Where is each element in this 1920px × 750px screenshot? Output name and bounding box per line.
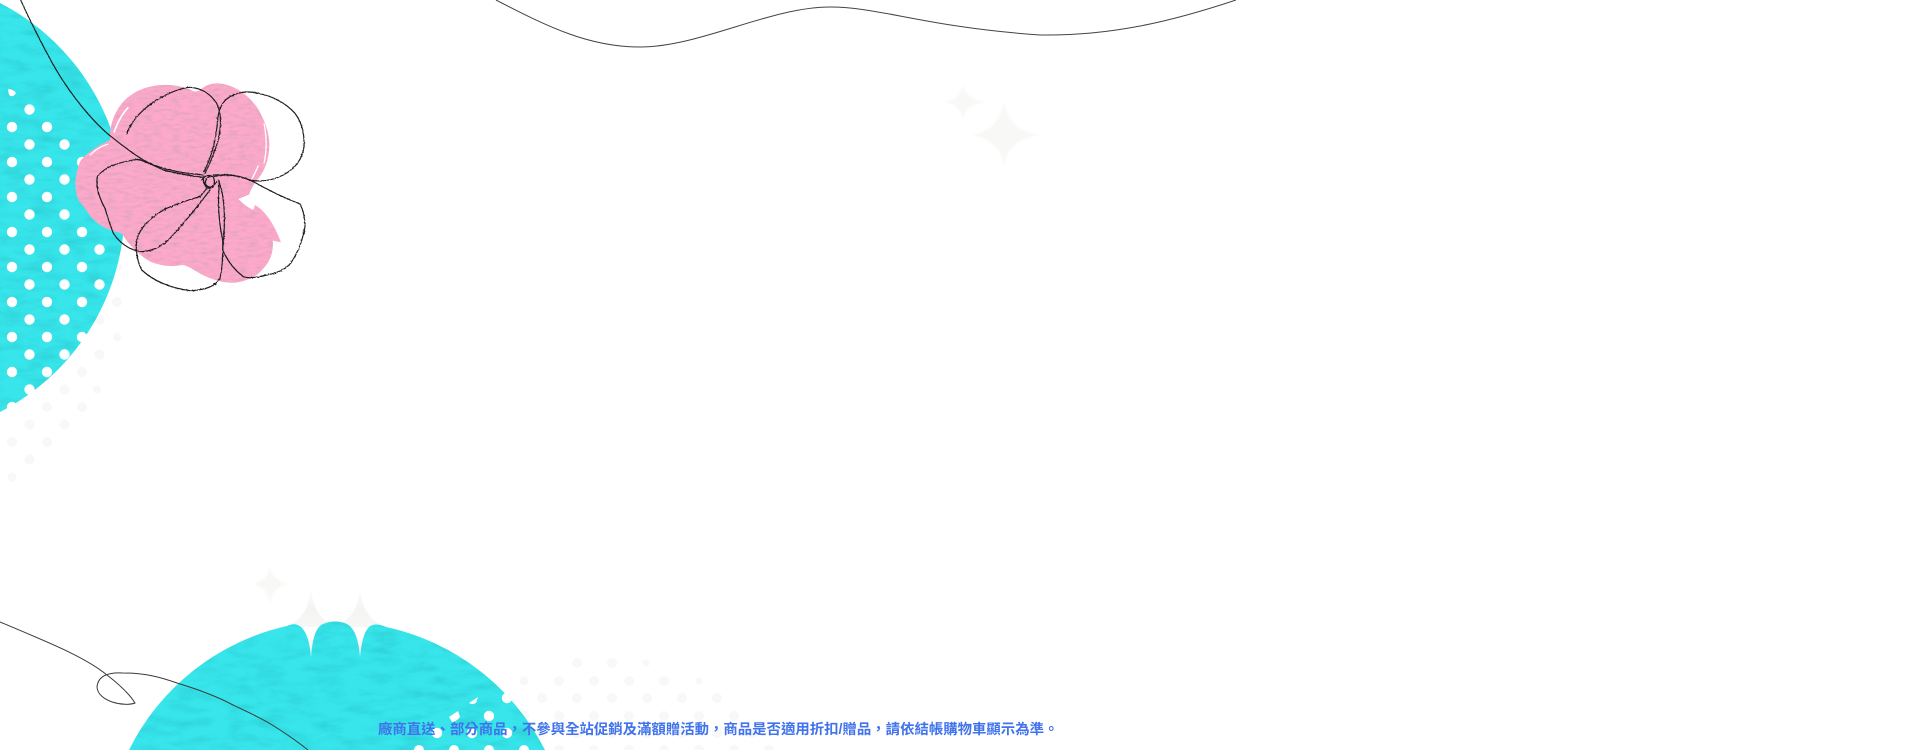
footnote text: 廠商直送、部分商品，不參與全站促銷及滿額贈活動，商品是否適用折扣/贈品，請依結帳購物車顯示為準。	[378, 722, 1058, 738]
pink flower	[75, 83, 281, 283]
cyan circle: top left	[0, 3, 125, 412]
sparkles: top centre	[943, 83, 1040, 167]
faint dots: bottom	[519, 658, 774, 750]
sparkles: bottom	[252, 566, 387, 662]
faint dots: left	[7, 262, 122, 482]
squiggle line: bottom left	[0, 622, 308, 750]
white dots: top left circle	[7, 89, 105, 412]
squiggle line: top	[496, 0, 1236, 47]
cyan circle: bottom with scalloped top	[129, 622, 545, 750]
white dots: bottom circle	[414, 693, 529, 750]
hand-drawn flower outline with stem	[21, 0, 305, 291]
